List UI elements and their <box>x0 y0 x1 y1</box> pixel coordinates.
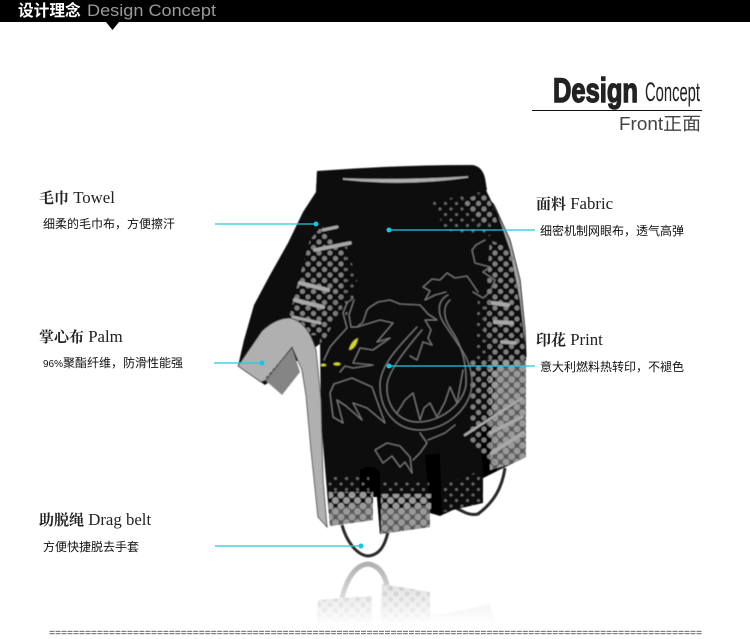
callout: Drag belt: 方便快捷脱去手套 <box>43 539 139 554</box>
callout: Fabric: 细密机制网眼布，透气高弹 <box>540 223 684 238</box>
finger gap shadows <box>360 428 497 534</box>
gray palm and thumb <box>238 318 327 527</box>
main black glove body <box>316 190 526 534</box>
cuff band <box>316 165 487 202</box>
callout: Palm: 掌心布 Palm <box>39 327 123 346</box>
callout: Palm <box>39 327 264 370</box>
callout: Towel: 毛巾 Towel <box>39 188 115 207</box>
callout: Drag belt <box>39 510 364 554</box>
callout: Fabric: 面料 Fabric <box>536 194 613 213</box>
callout: Palm: 96%聚酯纤维，防滑性能强 <box>43 355 183 370</box>
header Chinese title: 设计理念 <box>18 1 81 20</box>
black back of thumb <box>238 172 330 385</box>
glove reflection <box>318 561 490 618</box>
section heading: Design Concept Front: Front正面 <box>619 114 701 134</box>
right gray side panel <box>486 196 526 356</box>
callout: Towel: 细柔的毛巾布，方便擦汗 <box>43 216 175 231</box>
halftone dot pattern <box>285 192 526 534</box>
dragon yellow eyes <box>321 338 358 366</box>
bottom double-line divider: ============================================================================================================= <box>49 627 702 639</box>
dragon line art <box>324 240 495 473</box>
header English title: Design Concept <box>87 1 216 20</box>
top header bar <box>0 0 750 30</box>
callout: Print: 意大利燃料热转印，不褪色 <box>540 359 684 374</box>
section heading: Design Concept Front: Concept <box>645 77 700 107</box>
callout: Towel <box>39 188 318 231</box>
callout: Print: 印花 Print <box>536 330 603 349</box>
section heading: Design Concept Front: Design <box>553 72 638 110</box>
callout: Print <box>386 330 684 374</box>
glove illustration <box>238 165 526 556</box>
wrist strap loop right <box>456 468 505 515</box>
callout: Fabric <box>386 194 684 238</box>
light streaks <box>293 227 523 453</box>
callout: Drag belt: 助脱绳 Drag belt <box>39 510 151 529</box>
section heading: Design Concept Front <box>532 72 702 134</box>
wrist strap loop bottom <box>342 525 388 556</box>
